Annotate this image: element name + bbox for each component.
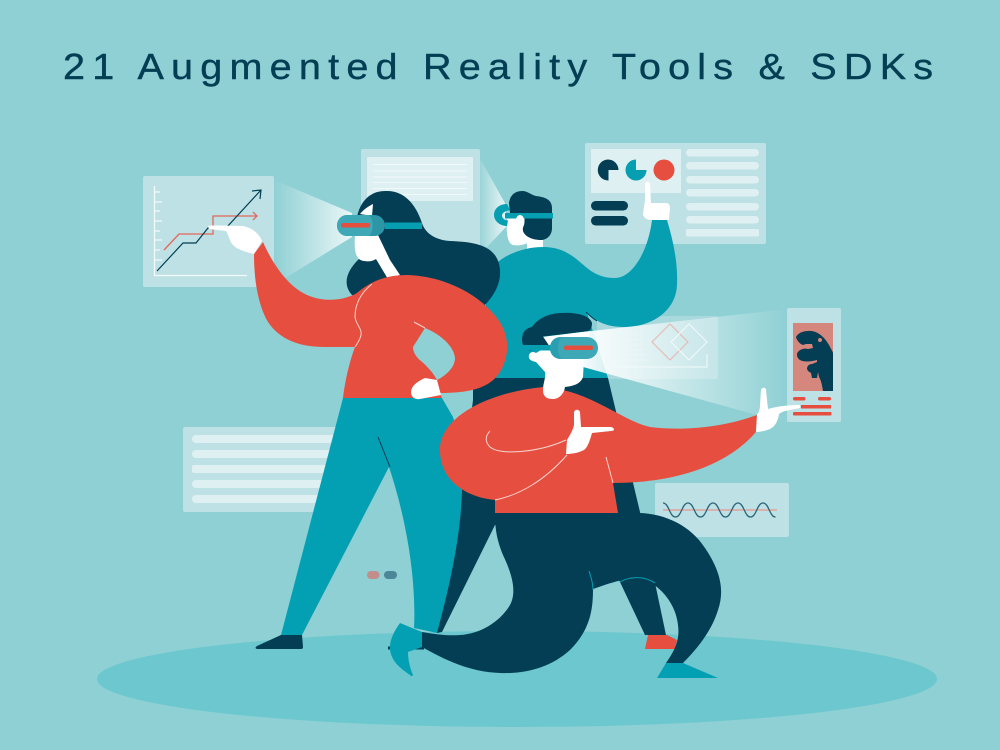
boot right xyxy=(657,663,718,678)
neck and face xyxy=(529,331,590,399)
trousers xyxy=(422,513,721,673)
goggles xyxy=(337,215,422,236)
sweater seams xyxy=(486,431,613,500)
panel: diamonds details xyxy=(612,324,707,367)
panel: line chart xyxy=(143,176,274,287)
navy shoe xyxy=(388,646,424,650)
dots xyxy=(367,571,397,579)
goggle band xyxy=(523,345,555,350)
face xyxy=(507,210,530,245)
chart axes xyxy=(154,186,247,276)
goggles xyxy=(550,337,598,359)
hair xyxy=(522,313,592,351)
panel: phone with dinosaur xyxy=(787,308,841,422)
boot left xyxy=(390,623,422,676)
beam: woman to chart xyxy=(274,180,352,283)
list bars xyxy=(686,149,759,236)
forehead xyxy=(360,204,373,216)
pointing hand xyxy=(756,388,800,432)
title: 21 Augmented Reality Tools & SDKs xyxy=(63,48,933,88)
panel: diamonds background xyxy=(597,316,718,379)
ear xyxy=(516,215,524,229)
neck xyxy=(527,238,543,252)
red chart line xyxy=(164,212,257,250)
trousers xyxy=(281,398,462,635)
floor ellipse xyxy=(97,631,937,727)
goggle ring xyxy=(494,204,510,226)
hair xyxy=(509,191,552,240)
face xyxy=(355,235,400,279)
panel: document xyxy=(361,149,480,259)
hand xyxy=(643,182,670,220)
beam: kneeling man to phone xyxy=(542,309,787,420)
figure: woman xyxy=(208,191,507,649)
trouser seams xyxy=(589,571,655,590)
sweater xyxy=(440,387,757,513)
trousers xyxy=(437,378,666,635)
navy bars xyxy=(591,201,628,210)
shoe xyxy=(256,635,303,649)
figure: kneeling man xyxy=(390,313,800,678)
hair xyxy=(347,191,500,307)
pointing hand xyxy=(208,226,262,254)
panel: wave chart xyxy=(655,483,789,537)
red circle xyxy=(654,160,674,180)
chest hand xyxy=(566,410,614,454)
icon: dinosaur xyxy=(796,331,833,391)
figure: man in back xyxy=(388,182,677,650)
sweater xyxy=(254,242,507,398)
teal pie xyxy=(626,160,646,181)
navy pie xyxy=(598,160,618,181)
red bars xyxy=(793,397,832,416)
goggle band xyxy=(505,213,553,218)
hip hand xyxy=(411,378,441,399)
panel: text list bottom left xyxy=(183,427,353,512)
red shoe xyxy=(645,635,677,649)
sweater seams xyxy=(355,284,425,347)
sweater xyxy=(480,220,677,378)
navy chart line xyxy=(157,190,261,271)
panel: dashboard xyxy=(585,143,766,244)
beam: man to document xyxy=(480,160,506,250)
